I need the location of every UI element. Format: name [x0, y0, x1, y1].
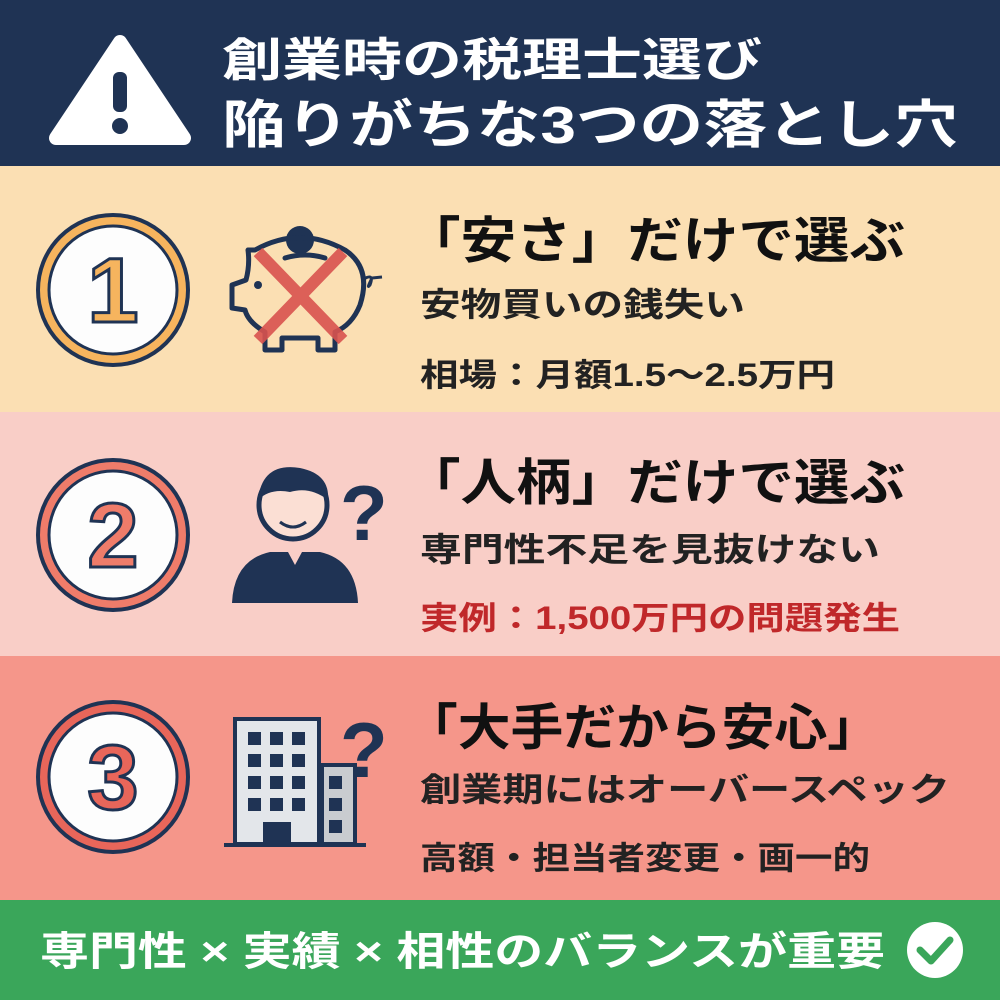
number badge 2: 2	[87, 485, 139, 587]
subtext 2: 専門性不足を見抜けない	[420, 531, 880, 568]
panel: pitfall 1	[0, 166, 1000, 412]
detail 2: 実例：1,500万円の問題発生	[420, 600, 900, 636]
panel: pitfall 3	[0, 656, 1000, 900]
icon: person with question: ?	[340, 469, 388, 557]
panel: pitfall 2	[0, 412, 1000, 656]
subtext 1: 安物買いの銭失い	[420, 286, 745, 323]
title: 創業時の税理士選び	[222, 34, 762, 86]
icon: building with question: ?	[340, 706, 388, 794]
heading 2: 「人柄」だけで選ぶ	[405, 455, 905, 511]
icon: warning triangle	[56, 42, 184, 138]
icon: piggy bank crossed	[232, 226, 382, 350]
subtext 3: 創業期にはオーバースペック	[420, 771, 950, 808]
heading 1: 「安さ」だけで選ぶ	[405, 213, 905, 269]
detail 1: 相場：月額1.5〜2.5万円	[420, 357, 835, 393]
number badge 1: 1	[87, 240, 139, 342]
header panel	[0, 0, 1000, 166]
number badge 2	[38, 460, 188, 610]
number badge 1	[38, 215, 188, 365]
footer banner	[0, 900, 1000, 1000]
icon: person with question	[232, 467, 388, 603]
icon: check circle	[907, 922, 963, 978]
footer text: 専門性 × 実績 × 相性のバランスが重要	[40, 930, 885, 974]
number badge 3: 3	[87, 727, 139, 829]
title	[222, 34, 958, 155]
title: 陥りがちな3つの落とし穴	[222, 97, 958, 155]
heading 3: 「大手だから安心」	[405, 700, 880, 756]
detail 3: 高額・担当者変更・画一的	[420, 840, 870, 876]
number badge 3	[38, 702, 188, 852]
icon: building with question	[224, 706, 388, 847]
